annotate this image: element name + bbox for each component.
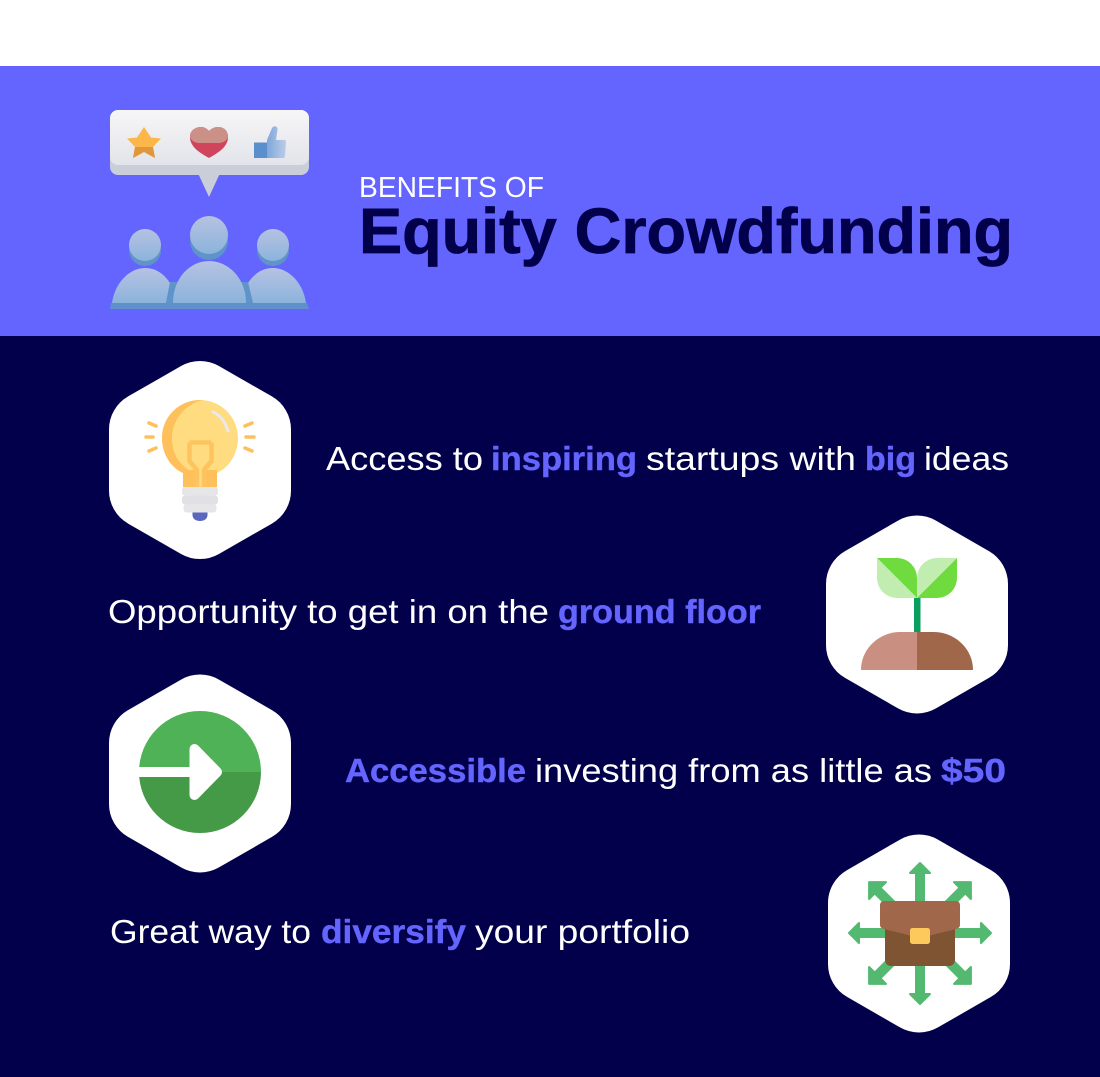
hexagon: arrow circle: [139, 711, 261, 834]
text: access to inspiring startups: [326, 440, 1009, 477]
text: great way to diversify: diversify: [321, 913, 467, 950]
heading: benefits of: BENEFITS OF: [359, 172, 544, 204]
text: access to inspiring startups: inspiring: [491, 440, 637, 477]
icon: heart: [190, 127, 228, 158]
icon: speech bubble with reactions above people: [110, 110, 309, 309]
text: accessible investing: Accessible: [345, 752, 526, 789]
hexagon: lightbulb: [146, 399, 254, 521]
text: great way to diversify: Great way to: [110, 913, 311, 950]
icon: arrow in circle: [139, 711, 261, 833]
text: great way to diversify: your portfolio: [475, 913, 690, 950]
icon: thumbs up: [254, 126, 286, 158]
text: opportunity ground floor: [108, 593, 761, 630]
icon: briefcase with arrows: [849, 863, 991, 1004]
text: accessible investing: investing from as little as: [535, 752, 932, 789]
hexagon: sprout: [861, 554, 973, 676]
hexagon: briefcase: [849, 863, 991, 1004]
panel: header band: [0, 66, 1100, 336]
icon: lightbulb: [146, 400, 254, 521]
text: accessible investing: $50: [941, 752, 1006, 789]
icon: star: [127, 127, 161, 158]
text: access to inspiring startups: ideas: [924, 440, 1009, 477]
speech bubble: [110, 110, 309, 197]
text: great way to diversify: [110, 913, 690, 950]
text: access to inspiring startups: startups with: [646, 440, 856, 477]
icon: three people: [110, 216, 309, 309]
text: access to inspiring startups: big: [865, 440, 916, 477]
title: Equity Crowdfunding: [359, 195, 1013, 267]
text: opportunity ground floor: Opportunity to get in on the: [108, 593, 549, 630]
panel: benefits background: [0, 336, 1100, 1077]
text: accessible investing: [345, 752, 1006, 789]
text: access to inspiring startups: Access to: [326, 440, 483, 477]
text: opportunity ground floor: ground floor: [558, 593, 761, 630]
icon: sprout: [861, 558, 973, 670]
